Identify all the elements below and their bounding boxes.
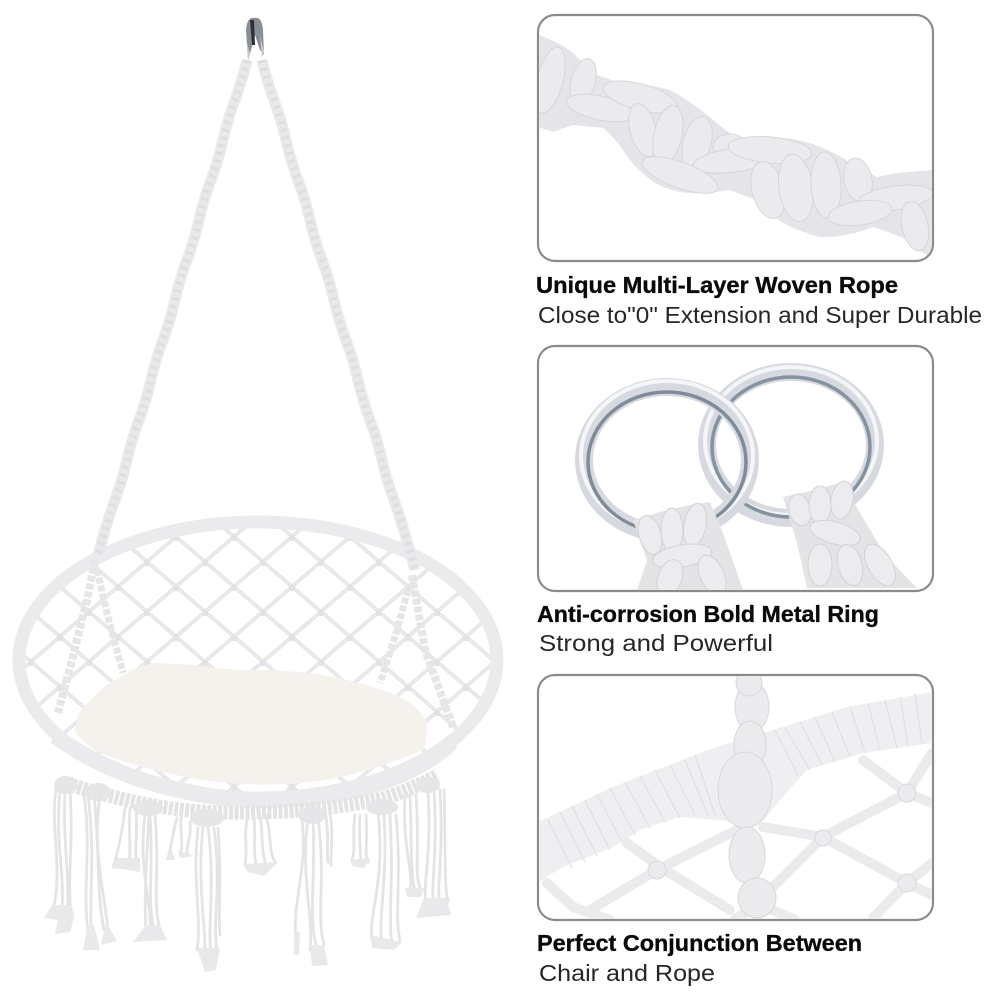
text: rope description: Close to"0" Extension and Super Durable [538, 302, 982, 328]
front band of the seat [55, 736, 452, 800]
hanging chair product illustration [15, 18, 505, 972]
macrame knot band [54, 775, 440, 827]
photo: interlinked metal rings [581, 367, 917, 600]
heading: metal ring: Anti-corrosion Bold Metal Ring [537, 601, 879, 627]
text: ring description: Strong and Powerful [539, 630, 773, 656]
metal hook [246, 18, 264, 60]
photo: rope joined to chair hoop [538, 670, 932, 920]
net lattice [26, 528, 490, 791]
heading: conjunction: Perfect Conjunction Between [537, 930, 862, 956]
cushion [75, 663, 427, 784]
fringe tassels [44, 790, 451, 972]
photo: woven rope close-up [529, 35, 934, 257]
heading: woven rope: Unique Multi-Layer Woven Rope [536, 272, 898, 298]
chair hoop [19, 522, 497, 798]
panel: metal ring detail [538, 346, 933, 600]
hanging ropes [58, 60, 453, 727]
text: conjunction description: Chair and Rope [539, 960, 715, 986]
panel: conjunction detail [538, 670, 933, 920]
panel: woven rope detail [529, 15, 934, 261]
